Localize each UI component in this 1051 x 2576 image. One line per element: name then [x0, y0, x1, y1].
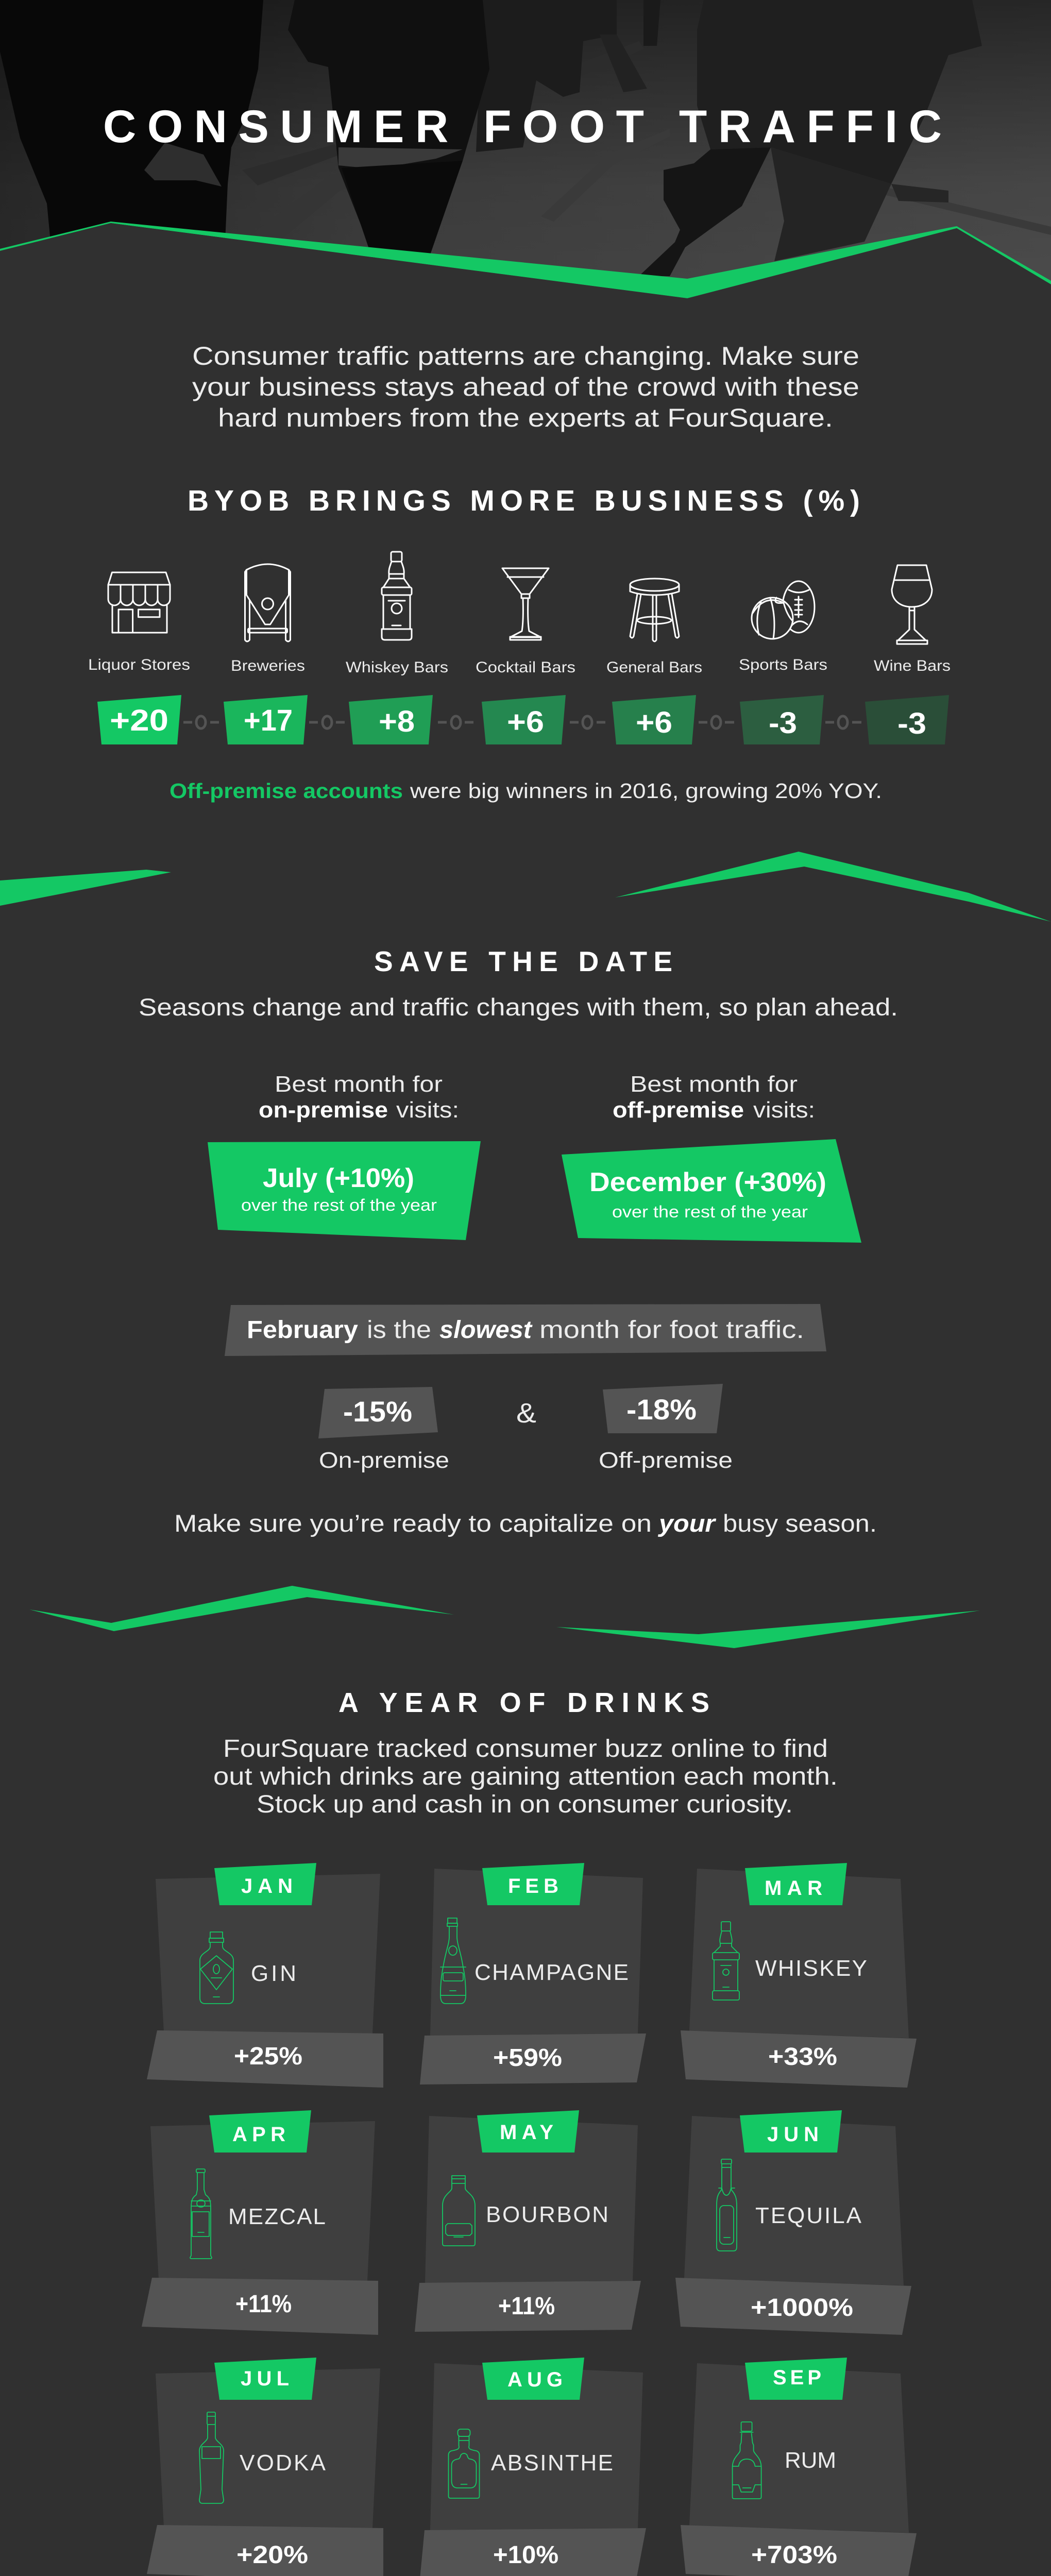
icon: sports balls: [752, 581, 815, 639]
February callout: month for foot traffic.: [539, 1316, 804, 1344]
dark body edge: [0, 223, 1051, 330]
card: September rum: [681, 2358, 917, 2576]
card: September rum: SEP: [773, 2366, 821, 2389]
ampersand: &: [516, 1398, 536, 1429]
icon: whiskey bottle: [713, 1922, 739, 2000]
card: August absinthe: +10%: [493, 2541, 558, 2569]
venue labels: Breweries: [231, 657, 305, 674]
card: May bourbon: MAY: [500, 2121, 553, 2144]
off-premise best month: Best month for: [630, 1072, 798, 1097]
on-premise best month: July (+10%): [263, 1163, 414, 1193]
card: April mezcal: [142, 2110, 378, 2335]
icon: liquor store: [108, 572, 170, 633]
hero green divider: [0, 222, 1051, 298]
card: April mezcal: MEZCAL: [228, 2204, 326, 2229]
icon: tequila bottle: [717, 2159, 737, 2251]
value badges: -3: [897, 707, 926, 740]
off-premise drop: [599, 1384, 733, 1473]
card: May bourbon: +11%: [498, 2293, 555, 2320]
card: March whiskey: MAR: [765, 1877, 822, 1900]
value badges: +6: [636, 706, 672, 739]
busy season note: Make sure you’re ready to capitalize on: [174, 1510, 652, 1537]
icon: whiskey bottle: [382, 552, 412, 640]
icon: bar stool: [630, 579, 679, 641]
off-premise best month: December (+30%): [589, 1167, 826, 1197]
BYOB venue row: [88, 552, 951, 744]
card: July vodka: VODKA: [240, 2450, 326, 2476]
busy season note: busy season.: [723, 1510, 877, 1537]
February callout: is the: [367, 1316, 431, 1344]
February callout: [225, 1304, 826, 1356]
card: January gin: GIN: [251, 1961, 296, 1986]
icon: champagne bottle: [440, 1918, 466, 2004]
on-premise drop: [318, 1387, 449, 1473]
card: July vodka: +20%: [236, 2541, 308, 2569]
divider right 3: [556, 1611, 980, 1648]
on-premise best month: over the rest of the year: [241, 1196, 437, 1214]
off-premise best month: over the rest of the year: [612, 1202, 808, 1221]
save the date subhead: Seasons change and traffic changes with them, so plan ahead.: [139, 993, 898, 1021]
card: March whiskey: +33%: [768, 2043, 837, 2071]
drinks intro text: Stock up and cash in on consumer curiosity.: [257, 1791, 793, 1818]
off-premise drop: Off-premise: [599, 1448, 733, 1473]
venue labels: Sports Bars: [739, 656, 827, 673]
off-premise note: Off-premise accounts: [169, 779, 403, 803]
venue labels: Cocktail Bars: [476, 659, 575, 676]
card: February champagne: [420, 1863, 646, 2084]
divider left 3: [29, 1586, 454, 1631]
card: June tequila: JUN: [767, 2123, 819, 2146]
divider right 2: [615, 852, 1051, 922]
card: January gin: +25%: [234, 2043, 302, 2070]
card: June tequila: [675, 2110, 911, 2335]
card: July vodka: [147, 2358, 383, 2576]
card: May bourbon: BOURBON: [486, 2202, 608, 2227]
value badges: +8: [379, 705, 415, 738]
icon: gin bottle: [200, 1932, 233, 2004]
February callout: February: [247, 1316, 358, 1344]
on-premise drop: -15%: [343, 1395, 412, 1428]
card: August absinthe: AUG: [507, 2368, 563, 2391]
off-premise best month: off-premise: [613, 1097, 744, 1123]
drinks intro text: out which drinks are gaining attention each month.: [213, 1763, 838, 1790]
icon: mezcal bottle: [190, 2169, 212, 2259]
card: March whiskey: WHISKEY: [755, 1956, 867, 1981]
venue labels: Whiskey Bars: [346, 659, 448, 676]
venue labels: General Bars: [606, 659, 702, 676]
connectors between badges: [183, 716, 861, 728]
value badges: +17: [244, 704, 293, 737]
drinks intro text: FourSquare tracked consumer buzz online to find: [223, 1735, 828, 1762]
venue labels: [88, 656, 951, 676]
on-premise best month: [208, 1072, 481, 1240]
off-premise drop: -18%: [626, 1393, 697, 1426]
card: August absinthe: [420, 2358, 646, 2576]
icon: vodka bottle: [199, 2412, 224, 2503]
card: May bourbon: [415, 2110, 641, 2332]
card: June tequila: +1000%: [751, 2294, 853, 2321]
on-premise drop: On-premise: [319, 1448, 449, 1473]
card: February champagne: FEB: [508, 1875, 558, 1897]
card: January gin: JAN: [241, 1875, 293, 1897]
heading: BYOB: BYOB BRINGS MORE BUSINESS (%): [188, 484, 860, 517]
card: July vodka: JUL: [241, 2367, 289, 2390]
value badges: -3: [769, 706, 797, 740]
card: June tequila: TEQUILA: [755, 2203, 862, 2228]
February callout: slowest: [439, 1316, 533, 1344]
busy season note: your: [658, 1510, 717, 1537]
card: January gin: [147, 1863, 383, 2088]
venue labels: Wine Bars: [874, 657, 951, 674]
busy season note: [174, 1510, 877, 1537]
on-premise best month: Best month for: [275, 1072, 443, 1097]
on-premise best month: visits:: [396, 1097, 459, 1123]
intro text: Consumer traffic patterns are changing. Make sure: [192, 342, 859, 370]
venue labels: Liquor Stores: [88, 656, 190, 673]
intro text: hard numbers from the experts at FourSquare.: [218, 403, 833, 432]
title: CONSUMER FOOT TRAFFIC: [103, 100, 942, 152]
on-premise best month: on-premise: [259, 1097, 388, 1123]
value badges: +20: [110, 704, 168, 737]
value badges: [97, 695, 949, 744]
card: February champagne: +59%: [493, 2044, 562, 2072]
icon: martini glass: [502, 568, 549, 640]
off-premise best month: visits:: [753, 1097, 815, 1123]
heading: a year of drinks: A YEAR OF DRINKS: [338, 1687, 709, 1718]
off-premise best month: [562, 1072, 861, 1243]
card: September rum: +703%: [751, 2541, 837, 2569]
drinks intro text: [213, 1735, 838, 1818]
hero photo: crowd walking: [0, 0, 1051, 309]
icon: absinthe bottle: [448, 2429, 479, 2498]
card: February champagne: CHAMPAGNE: [474, 1960, 629, 1985]
off-premise note: were big winners in 2016, growing 20% YOY.: [410, 779, 882, 803]
icon: rum bottle: [733, 2422, 761, 2499]
card: September rum: RUM: [785, 2448, 836, 2473]
icon: bourbon bottle: [443, 2176, 475, 2246]
icon: brewery tank: [245, 564, 291, 641]
card: August absinthe: ABSINTHE: [491, 2450, 613, 2476]
heading: save the date: SAVE THE DATE: [374, 945, 672, 977]
card: April mezcal: +11%: [235, 2291, 292, 2318]
icon: wine glass: [892, 565, 932, 644]
off-premise note: [169, 779, 882, 803]
intro text: [192, 342, 859, 432]
card: April mezcal: APR: [232, 2123, 285, 2146]
value badges: +6: [507, 705, 544, 739]
divider left 2: [0, 870, 171, 906]
card: March whiskey: [681, 1863, 917, 2088]
intro text: your business stays ahead of the crowd with these: [192, 372, 859, 401]
